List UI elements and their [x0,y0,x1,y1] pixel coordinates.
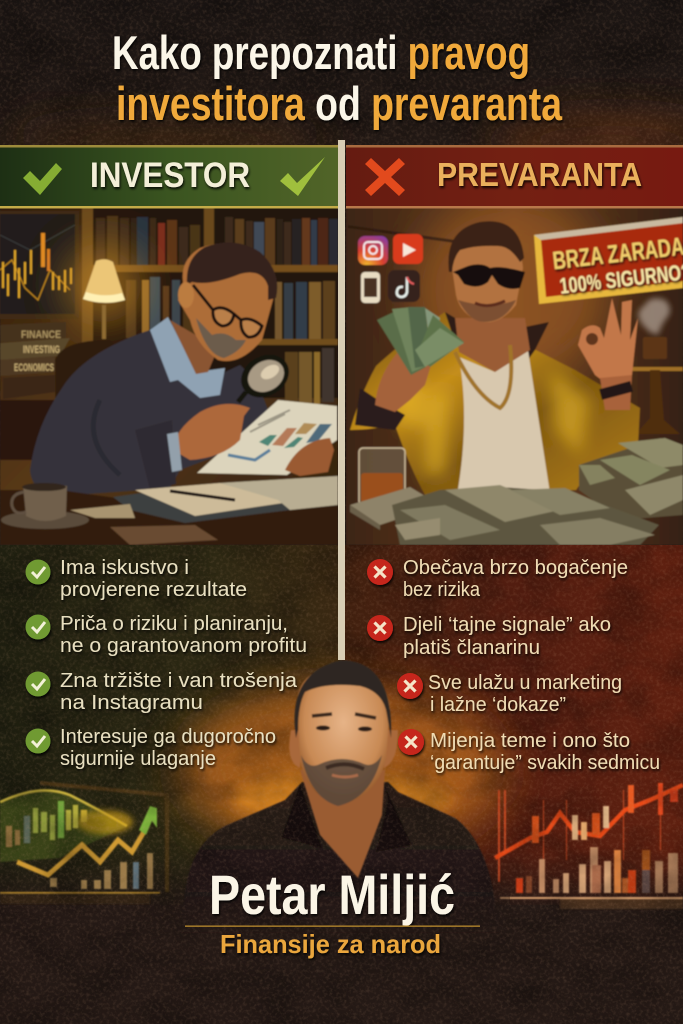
chain [455,345,511,408]
stacked finance books: FINANCE [21,329,61,341]
trait 2: ne o garantovanom profitu [60,634,307,657]
shirt fade [175,880,510,932]
table lamp [64,245,144,339]
hookah [625,298,683,434]
chart board [0,211,79,319]
tee shirt [457,350,550,495]
armchair [54,340,107,398]
hair [187,243,277,300]
trait 2 [26,612,307,657]
trait 3: na Instagramu [60,691,203,714]
trait 3 [26,669,298,714]
magnifying glass [236,356,290,404]
neck [455,318,530,372]
collar [281,784,412,852]
list: scammer traits [367,556,660,774]
trait 1 [26,556,247,601]
rust glow behind title [10,112,683,168]
hair [448,221,524,272]
icon: instagram [358,236,388,265]
hand on magnifier [173,404,250,460]
sheet of paper with chart [197,400,337,475]
bookshelf [82,208,338,404]
center divider [338,140,345,660]
jacket [350,312,640,495]
banner: quick earnings [534,217,683,304]
heading: INVESTOR [90,156,250,195]
hair [294,660,391,738]
ears [289,730,398,768]
trait 4: ‘garantuje” svakih sedmicu [430,751,660,774]
trait 3 [397,671,622,716]
portrait: head of Petar Miljić [289,660,398,878]
forearm and watch [600,375,632,410]
header: investor [0,145,338,208]
social media icons [358,234,423,303]
icon: youtube [393,234,423,264]
trait 1 [367,556,628,601]
stacked finance books: INVESTING [23,344,60,356]
ear [178,282,194,308]
stacked finance books [0,322,70,460]
okay hand [578,298,638,390]
header: scammer [346,145,683,208]
inner glow [232,774,452,826]
hand with cash [375,345,431,412]
icon: red cross [365,158,405,196]
other hand [285,438,334,476]
panel: scammer scene [346,200,683,545]
heading: PREVARANTA [437,156,642,193]
title line 2: investitora od prevaranta [116,77,563,130]
trait 4: Interesuje ga dugoročno [60,725,276,748]
trait 2: platiš članarinu [403,636,540,659]
trait 1: Ima iskustvo i [60,556,189,579]
name underline [185,926,480,927]
lower right background [342,545,683,905]
whisky glass [359,448,405,505]
trait 1: provjerene rezultate [60,578,247,601]
chart: crashing red [495,783,683,909]
desk [0,490,308,545]
scammer man [350,221,640,495]
lower panel backgrounds [0,545,683,1024]
investor man [30,243,337,496]
sunglasses [453,264,525,289]
trait 4 [26,725,276,770]
glasses [193,285,262,337]
chart: rising green [0,783,167,904]
trait 4: Mijenja teme i ono što [430,729,630,752]
orange glow [177,685,507,855]
trait 1: bez rizika [403,578,481,601]
shirt [180,782,500,932]
lower left background [0,545,342,905]
trait 2: Priča o riziku i planiranju, [60,612,288,635]
list: investor traits [26,556,307,770]
head [178,243,275,361]
sweater [30,330,268,496]
trait 4 [398,729,660,774]
eyes and brows [312,714,376,777]
title [112,26,563,130]
neck [170,320,218,374]
icon: check right [280,157,325,196]
neck [300,770,385,878]
trait 2: Djeli ‘tajne signale” ako [403,613,611,636]
icon: tiktok [388,270,420,302]
title line 1: Kako prepoznati pravog [112,26,530,79]
trait 4: sigurnije ulaganje [60,747,216,770]
icon: check left [23,163,62,195]
trait 3: i lažne ‘dokaze” [430,693,566,716]
mouth [475,301,505,306]
trait 1: Obečava brzo bogačenje [403,556,628,579]
coffee cup [1,483,89,529]
stacks of cash [350,438,683,545]
portrait: shirt and shoulders [175,782,510,932]
trait 3: Zna tržište i van trošenja [60,669,298,692]
shirt collar [150,317,225,398]
subtitle: Finansije za narod [220,929,441,959]
trait 2 [367,613,611,659]
open documents [70,476,338,545]
panel: investor scene [0,208,338,545]
fan of dollar bills [377,307,464,375]
face [297,667,390,805]
stacked finance books: ECONOMICS [14,362,54,374]
name: Petar Miljić [209,863,455,926]
head [452,245,524,322]
trait 3: Sve ulažu u marketing [428,671,622,694]
icon: phone [361,272,380,303]
beard [301,755,382,806]
